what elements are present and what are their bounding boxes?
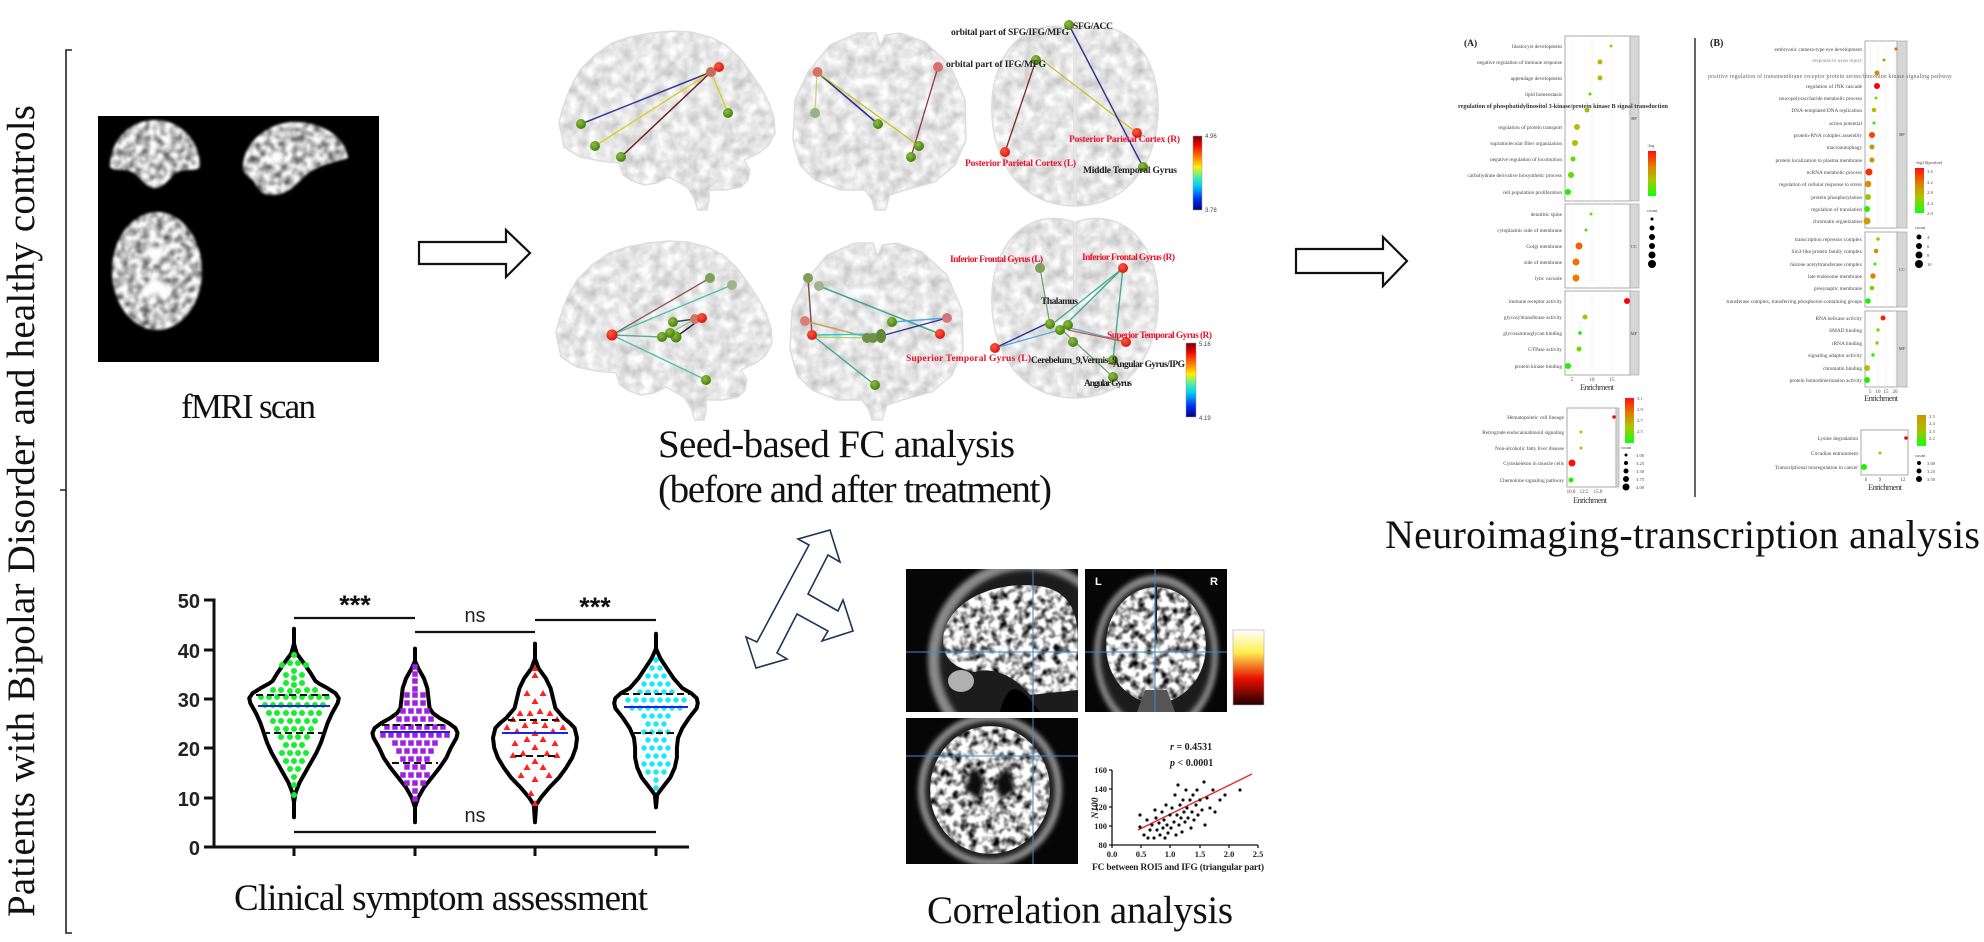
region labels top: orbital part of IFG/MFG (946, 60, 1047, 70)
significance bars: ns (464, 605, 486, 627)
A axis: 10 (1590, 378, 1595, 383)
B KEGG panel (1775, 414, 1936, 492)
B term labels: late endosome membrane (1808, 274, 1863, 280)
B term labels: regulation of JNK cascade (1806, 83, 1863, 90)
B KEGG panel: 6 (1865, 478, 1868, 483)
A term labels: immune receptor activity (1509, 299, 1562, 305)
B KEGG panel: Enrichment (1868, 482, 1903, 492)
B term labels: ncRNA metabolic process (1807, 170, 1862, 176)
B legend: 10 (1927, 262, 1932, 267)
colour bar bottom: 5.16 (1199, 342, 1211, 348)
bracket (60, 50, 72, 933)
scatter tick labels: 1.5 (1195, 849, 1205, 859)
A KEGG panel (1482, 396, 1645, 505)
A panels: BP (1631, 116, 1637, 121)
significance bars: *** (339, 590, 371, 620)
A axis: 15 (1610, 378, 1615, 383)
brain: axial view bottom (990, 218, 1158, 398)
B panels: CC (1899, 267, 1905, 272)
B KEGG panel: 2.3 (1929, 429, 1935, 434)
B legend: 6 (1927, 244, 1930, 249)
scatter tick labels: 0.5 (1136, 849, 1146, 859)
region labels bottom: Inferior Frontal Gyrus (R) (1082, 252, 1175, 263)
scatter plot (1091, 742, 1264, 873)
significance bars (294, 590, 656, 832)
B legend: 2.0 (1927, 211, 1933, 216)
arrow: FC analysis to transcription (1296, 237, 1407, 286)
B KEGG panel: 3.25 (1927, 469, 1936, 474)
scatter stats: r = 0.4531 (1170, 742, 1212, 753)
A term labels: Golgi membrane (1526, 244, 1563, 250)
panel: correlation brain maps (906, 560, 1264, 866)
brain: coronal view top (793, 33, 966, 210)
colour bar top: 3.78 (1205, 208, 1217, 214)
B dots (1864, 48, 1898, 383)
label B: (B) (1710, 38, 1723, 49)
B term labels: Sin3-like protein family complex (1792, 248, 1862, 255)
A term labels: supramolecular fiber organization (1490, 140, 1562, 147)
B term labels: response to axon injury (1812, 58, 1862, 64)
A KEGG panel: 3.00 (1636, 453, 1645, 458)
fMRI scan caption: fMRI scan (181, 387, 316, 426)
B term labels: protein-RNA complex assembly (1794, 133, 1862, 139)
scatter tick labels: 100 (1094, 821, 1107, 831)
B term labels: protein localization to plasma membrane (1776, 158, 1863, 164)
significance bars: *** (579, 592, 611, 622)
B term labels: SMAD binding (1829, 328, 1862, 334)
A axis: 5 (1571, 378, 1574, 383)
scatter tick labels: 0.0 (1107, 849, 1117, 859)
B legend: 2.8 (1927, 190, 1933, 195)
B term labels: positive regulation of transmembrane receptor protein serine/threonine kinase signaling pathway (1708, 73, 1952, 80)
seed-based FC caption: (before and after treatment) (658, 468, 1052, 511)
A term labels: glycosyltransferase activity (1504, 314, 1562, 321)
A panels (1565, 36, 1639, 375)
B KEGG panel: 2.2 (1929, 436, 1935, 441)
B panels: BP (1899, 132, 1905, 137)
left title: study population: Patients with Bipolar Disorder and healthy controls (0, 105, 43, 917)
A term labels: cytoplasmic side of membrane (1497, 227, 1563, 234)
axis tick labels: 20 (178, 739, 200, 761)
B term labels: chromatin binding (1823, 366, 1862, 372)
B term labels: protein phosphorylation (1811, 195, 1862, 201)
A term labels (1458, 44, 1669, 370)
scatter stats (1169, 742, 1213, 769)
A legend (1647, 143, 1658, 268)
B term labels: regulation of cellular response to stress (1779, 181, 1862, 188)
brain: coronal view bottom (790, 243, 963, 420)
scatter tick labels (1094, 765, 1263, 859)
B legend: 2.4 (1927, 201, 1933, 206)
B term labels: protein homodimerization activity (1790, 378, 1862, 384)
A term labels: lytic vacuole (1535, 276, 1563, 282)
region labels bottom (906, 252, 1212, 389)
panel: enrichment analysis A (1458, 36, 1669, 505)
fMRI axial slice (112, 212, 202, 330)
B axis: 15 (1884, 390, 1889, 395)
B KEGG panel: 2.4 (1929, 421, 1935, 426)
A panels: CC (1631, 244, 1637, 249)
A KEGG panel: 12.5 (1580, 490, 1589, 495)
A axis (1571, 378, 1615, 392)
scatter tick labels: 160 (1094, 765, 1107, 775)
B legend: 8 (1927, 253, 1930, 258)
A KEGG panel: 2.9 (1637, 407, 1643, 412)
colour bar top (1193, 134, 1217, 214)
region labels top (946, 22, 1180, 176)
A term labels: cell population proliferation (1503, 189, 1562, 196)
A term labels: negative regulation of immune response (1477, 59, 1563, 66)
A axis: Enrichment (1580, 382, 1615, 392)
axis tick labels: 0 (189, 838, 200, 860)
panel: seed-based FC before treatment (559, 20, 1217, 214)
divider between A and B (1694, 38, 1696, 497)
panel: clinical violin plot (178, 590, 698, 860)
colour bar bottom (1186, 342, 1211, 422)
scatter tick labels: 80 (1098, 840, 1107, 850)
panel: fMRI scan (98, 116, 379, 362)
A term labels: side of membrane (1524, 259, 1563, 266)
region labels top: orbital part of SFG/IFG/MFG (951, 28, 1070, 38)
region labels bottom: Superior Temporal Gyrus (L) (906, 353, 1031, 364)
region labels top: Middle Temporal Gyrus (1083, 166, 1177, 176)
A KEGG panel: 4.00 (1636, 485, 1645, 490)
B axis: 10 (1876, 390, 1881, 395)
regression line (1138, 774, 1252, 830)
B KEGG panel: Transcriptional misregulation in cancer (1775, 465, 1858, 471)
A term labels: dendritic spine (1531, 212, 1563, 218)
axis tick labels: 40 (178, 641, 200, 663)
B term labels: rRNA binding (1832, 341, 1862, 347)
B KEGG panel: Circadian entrainment (1811, 451, 1859, 457)
B term labels: macroautophagy (1827, 145, 1862, 151)
B legend: count (1915, 225, 1926, 230)
clinical caption: Clinical symptom assessment (234, 878, 649, 919)
A term labels: negative regulation of locomotion (1490, 156, 1562, 163)
seed-based FC caption: Seed-based FC analysis (658, 423, 1015, 466)
correlation caption: Correlation analysis (927, 889, 1233, 932)
scatter tick labels: 2.0 (1224, 849, 1234, 859)
B KEGG panel: count (1915, 453, 1926, 458)
A term labels: lipid homeostasis (1525, 92, 1562, 98)
scatter tick labels: 140 (1094, 784, 1107, 794)
MRI axial (906, 714, 1078, 866)
region labels bottom: Thalamus (1041, 297, 1078, 307)
B axis: 20 (1892, 390, 1898, 395)
region labels top: Posterior Parietal Cortex (L) (965, 158, 1076, 169)
axis tick labels: 10 (178, 789, 200, 811)
B axis: 5 (1869, 390, 1872, 395)
A legend: count (1647, 208, 1658, 213)
A dots (1565, 44, 1630, 369)
A term labels: protein kinase binding (1515, 364, 1562, 370)
violin 1 green (249, 629, 339, 817)
region labels bottom: Inferior Frontal Gyrus (L) (950, 254, 1043, 265)
B term labels: transferase complex, transferring phosphorus-containing groups (1727, 298, 1862, 305)
A KEGG panel: 2.7 (1637, 418, 1643, 423)
B term labels (1708, 47, 1952, 384)
colour bar bottom: 4.19 (1199, 416, 1211, 422)
scatter stats: p < 0.0001 (1169, 758, 1213, 769)
MRI coronal: L (1095, 576, 1102, 588)
scatter tick labels: 120 (1094, 802, 1107, 812)
region labels bottom: Angular Gyrus/IPG (1113, 360, 1186, 370)
A KEGG panel: 3.1 (1637, 396, 1643, 401)
heat colour bar (1233, 630, 1264, 705)
A term labels: GTPase activity (1528, 347, 1562, 353)
region labels bottom: Angular Gyrus (1084, 379, 1132, 389)
B term labels: transcription repressor complex (1795, 237, 1862, 243)
region labels top: Posterior Parietal Cortex (R) (1069, 134, 1180, 145)
panel: enrichment analysis B (1708, 38, 1952, 492)
brain: sagittal view bottom (556, 241, 772, 420)
B KEGG panel: 12 (1900, 478, 1906, 483)
axis tick labels: 50 (178, 591, 200, 613)
A term labels: carbohydrate derivative biosynthetic process (1467, 173, 1562, 179)
A term labels: glycosaminoglycan binding (1503, 331, 1562, 337)
B KEGG panel: Lysine degradation (1818, 436, 1858, 442)
A panels: MF (1631, 331, 1638, 336)
A KEGG panel: count (1621, 445, 1632, 450)
MRI coronal: R (1210, 576, 1218, 588)
A KEGG panel: Hematopoietic cell lineage (1507, 415, 1565, 421)
scatter points (1140, 782, 1240, 838)
scatter axes (1109, 770, 1258, 848)
B term labels: mucopolysaccharide metabolic process (1779, 96, 1862, 102)
B KEGG panel: 9 (1879, 478, 1882, 483)
A term labels: blastocyst development (1512, 44, 1563, 50)
seed-based FC caption (658, 423, 1052, 511)
B legend: 4 (1927, 235, 1930, 240)
A term labels: regulation of protein transport (1498, 124, 1563, 131)
fMRI coronal slice (110, 120, 200, 188)
B term labels: embryonic camera-type eye development (1774, 47, 1863, 53)
panel: seed-based FC after treatment (556, 218, 1212, 422)
region labels bottom: Cerebelum_9,Vermis_9 (1031, 356, 1117, 366)
A KEGG panel: 10.0 (1567, 490, 1576, 495)
MRI sagittal (906, 569, 1078, 712)
violin 4 cyan (614, 634, 698, 807)
B panels (1865, 41, 1907, 387)
A KEGG panel: Chemokine signaling pathway (1500, 478, 1564, 484)
B term labels: signaling adaptor activity (1808, 353, 1862, 359)
label A: (A) (1464, 38, 1477, 49)
axes (204, 600, 689, 856)
B legend: 3.6 (1927, 169, 1933, 174)
A KEGG panel: Enrichment (1573, 495, 1608, 505)
B legend (1915, 160, 1943, 268)
B term labels: action potential (1829, 121, 1863, 127)
brain: axial view top (992, 20, 1158, 206)
A term labels: appendage development (1511, 76, 1563, 82)
B KEGG panel: 3.00 (1927, 461, 1936, 466)
A KEGG panel: 3.50 (1636, 469, 1645, 474)
B KEGG panel: 2.5 (1929, 414, 1935, 419)
region labels bottom: Superior Temporal Gyrus (R) (1107, 330, 1212, 341)
violin 2 purple (372, 649, 458, 822)
significance bars: ns (464, 805, 486, 827)
scatter tick labels: 2.5 (1253, 849, 1263, 859)
neuroimaging-transcription caption: Neuroimaging-transcription analysis (1385, 512, 1980, 557)
B term labels: RNA helicase activity (1816, 316, 1862, 322)
A KEGG panel: 2.5 (1637, 429, 1643, 434)
axis tick labels (178, 591, 200, 860)
A KEGG panel: Non-alcoholic fatty liver disease (1495, 445, 1565, 452)
B KEGG panel: 3.50 (1927, 477, 1936, 482)
B axis: Enrichment (1864, 393, 1899, 403)
region labels top: SFG/ACC (1073, 22, 1113, 32)
axis titles: N100 (1091, 797, 1101, 820)
B legend: -log10(pvalue) (1915, 160, 1943, 165)
brain: sagittal view top (559, 31, 775, 210)
violin 3 red (493, 644, 577, 822)
MRI coronal (1085, 569, 1227, 712)
fMRI sagittal slice (243, 122, 348, 195)
A KEGG panel: 3.75 (1636, 477, 1645, 482)
scatter tick labels: 1.0 (1165, 849, 1175, 859)
B term labels: histone acetyltransferase complex (1790, 261, 1862, 268)
A KEGG panel: Cytoskeleton in muscle cells (1503, 461, 1564, 467)
scatter plot: FC between ROI5 and IFG (triangular part) (1092, 862, 1264, 873)
arrow: fMRI to FC analysis (419, 230, 530, 277)
three-way arrow (746, 530, 853, 668)
B term labels: chromatin organization (1813, 219, 1862, 225)
A term labels: regulation of phosphatidylinositol 3-kinase/protein kinase B signal transduction (1458, 103, 1669, 110)
axis tick labels: 30 (178, 690, 200, 712)
A KEGG panel: Retrograde endocannabinoid signaling (1482, 430, 1564, 436)
A KEGG panel: 3.25 (1636, 461, 1645, 466)
A KEGG panel: 15.0 (1594, 490, 1603, 495)
colour bar top: 4.96 (1205, 134, 1217, 140)
B term labels: DNA-templated DNA replication (1791, 108, 1862, 114)
A legend: -log (1647, 143, 1655, 148)
B legend: 3.2 (1927, 180, 1933, 185)
B term labels: regulation of translation (1811, 206, 1862, 213)
B term labels: presynaptic membrane (1814, 286, 1863, 292)
B panels: MF (1899, 346, 1906, 351)
